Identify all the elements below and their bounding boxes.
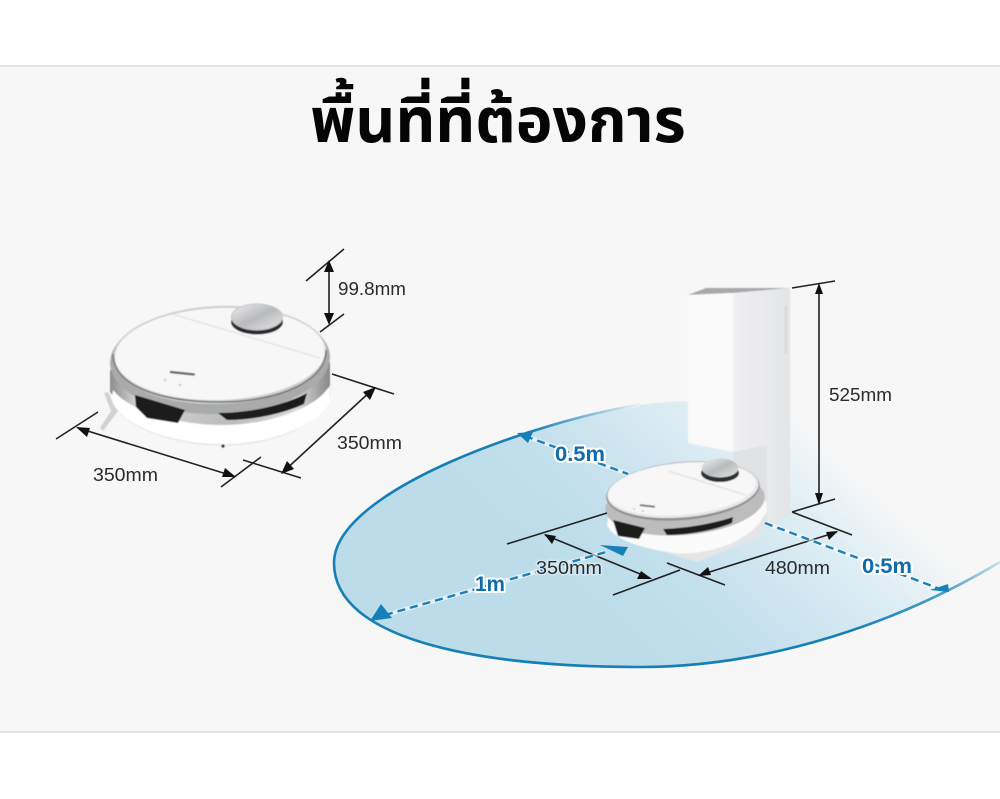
dimensions: standalone robot [56, 249, 406, 487]
dimensions: standalone robot: 350mm [337, 433, 402, 453]
robot vacuum: standalone [100, 302, 332, 448]
lidar [231, 310, 283, 334]
label: 350mm depth: 350mm [536, 558, 602, 578]
window left [135, 395, 185, 423]
blue clearance arrows [370, 432, 949, 621]
title: พื้นที่ที่ต้องการ [310, 77, 686, 156]
dimensions: standalone robot: 99.8mm [338, 279, 406, 299]
dimensions: station: 480mm [765, 558, 830, 578]
window left [613, 520, 645, 539]
blue clearance arrows: 0.5m [862, 555, 912, 578]
window right [218, 393, 307, 420]
clean station tower [688, 288, 790, 530]
blue clearance arrows: 0.5m [555, 443, 605, 466]
dimensions: station: 525mm [829, 385, 892, 405]
side brush [100, 392, 118, 431]
blue clearance arrows: 1m [475, 573, 505, 596]
robot vacuum: docked [603, 455, 767, 562]
dimensions: station [507, 281, 892, 595]
floor clearance area [334, 401, 1000, 667]
window right [663, 517, 733, 535]
dimensions: standalone robot: 350mm [93, 465, 158, 485]
